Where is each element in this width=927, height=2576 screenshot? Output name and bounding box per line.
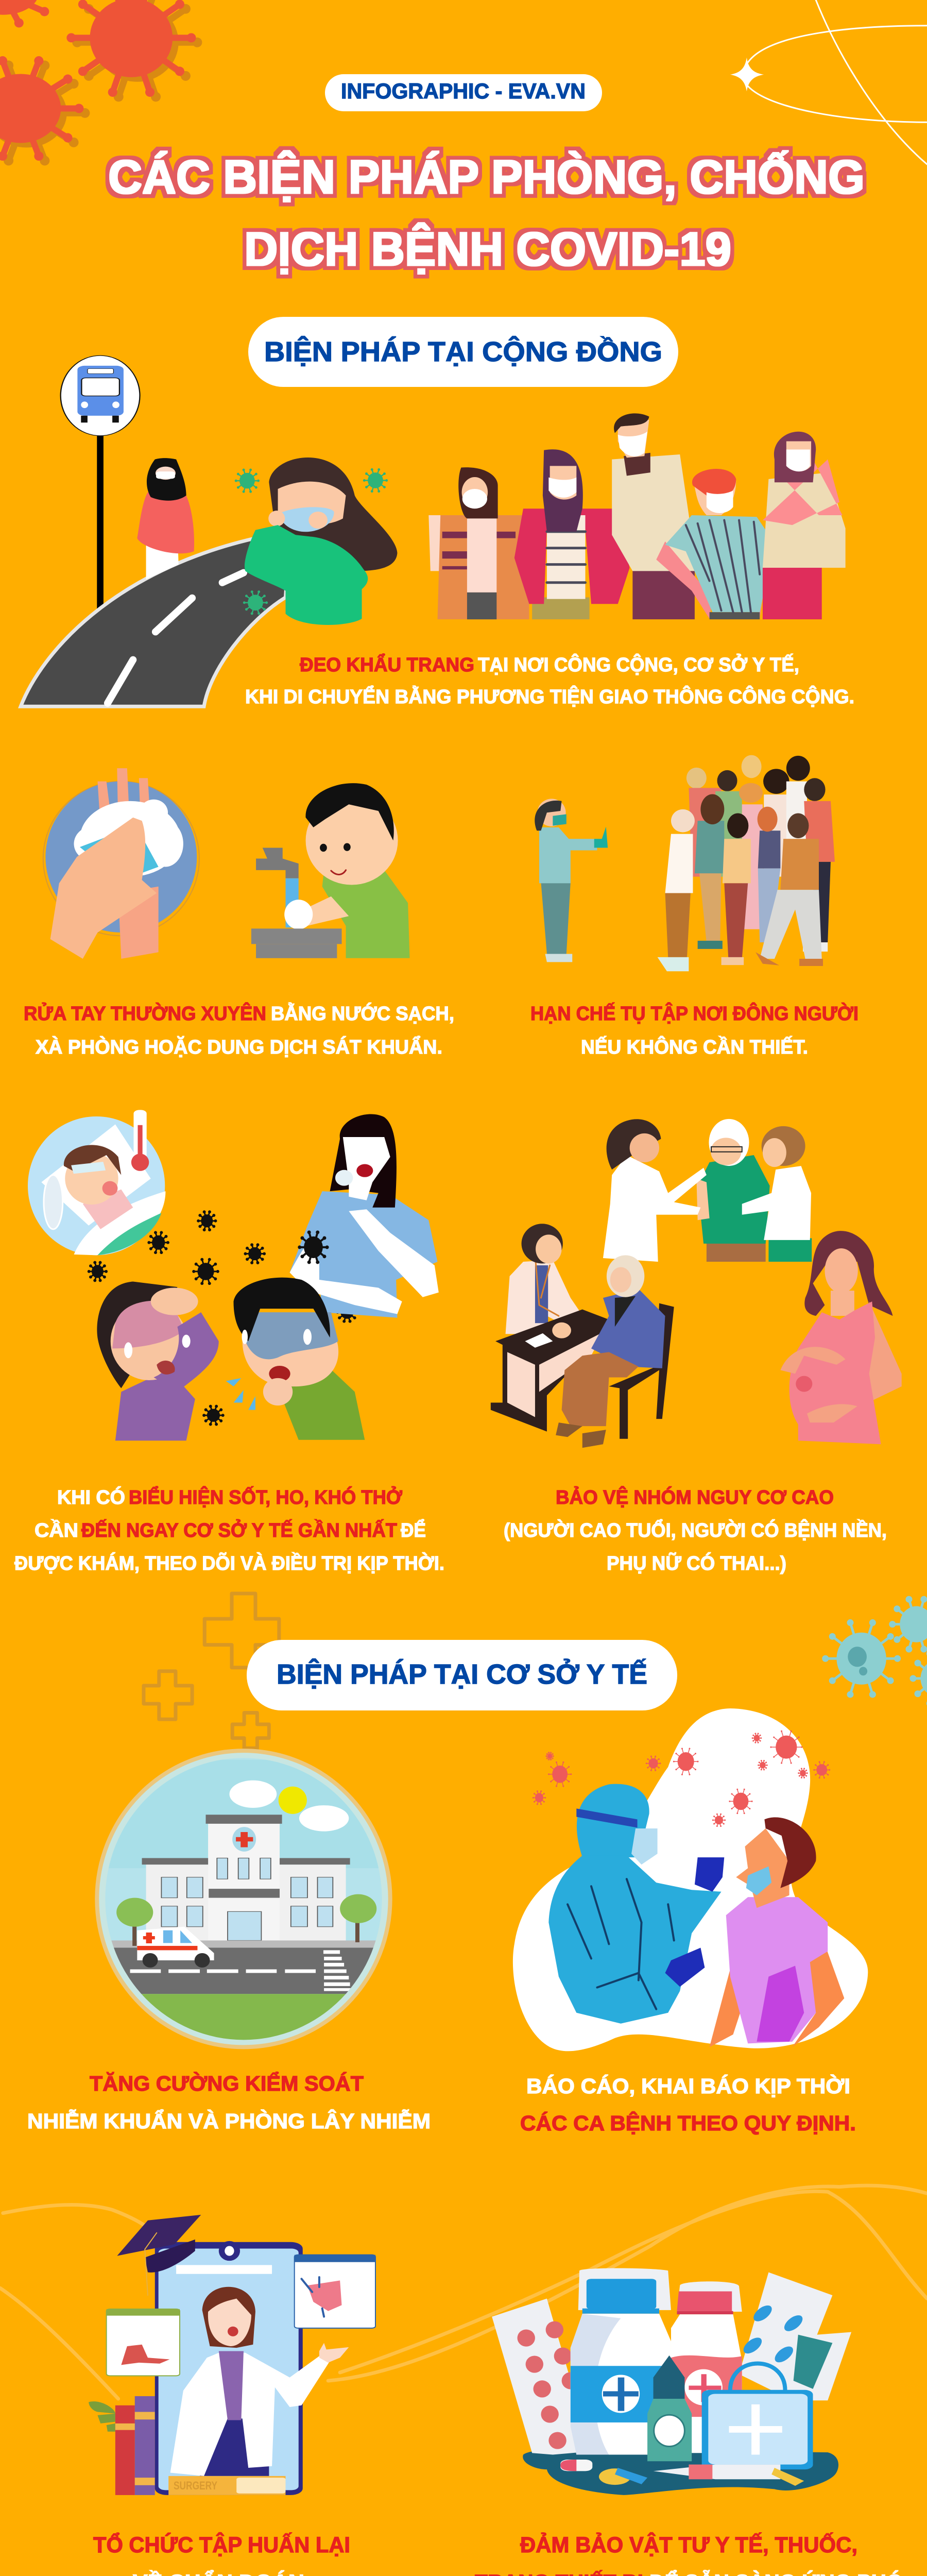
red virus cluster top-left [0, 0, 197, 161]
text: protect high-risk groups: BẢO VỆ NHÓM NGUY CƠ CAO [556, 1486, 834, 1509]
text: ensure supplies [475, 2532, 903, 2576]
text: wear masks [245, 653, 854, 708]
front row [658, 794, 823, 971]
dark base [523, 2450, 838, 2495]
decorative arcs and star top-right [730, 0, 927, 164]
icon: pregnant woman [780, 1231, 902, 1444]
doctor [170, 2287, 349, 2476]
icon: woman with fever holding forehead [97, 1282, 219, 1440]
text: when symptomatic: ĐƯỢC KHÁM, THEO DÕI VÀ ĐIỀU TRỊ KỊP THỜI. [14, 1552, 444, 1574]
icon: doctor treating elderly patient [603, 1119, 812, 1262]
books left [89, 2396, 155, 2495]
virus shadows [0, 0, 197, 161]
virus top [71, 0, 191, 92]
person orange coat [428, 467, 529, 619]
hospital in bubble [97, 1751, 390, 2047]
text: wash hands [24, 1002, 454, 1058]
text: infection control: TĂNG CƯỜNG KIỂM SOÁT [90, 2071, 364, 2095]
virus left [0, 61, 79, 156]
icon: black virus particles [89, 1212, 356, 1425]
section heading: community: BIỆN PHÁP TẠI CỘNG ĐỒNG [264, 336, 662, 367]
text: infection control: NHIỄM KHUẨN VÀ PHÒNG LÂY NHIỄM [27, 2109, 431, 2133]
icon: online medical training phone [89, 2215, 375, 2495]
teal viruses top-right [826, 1599, 927, 1703]
book label: SURGERY [174, 2479, 217, 2492]
icon: coughing man in green [226, 1278, 365, 1440]
title: DỊCH BỆNH COVID-19 [244, 223, 731, 276]
person red jacket [514, 449, 630, 619]
woman crossed arms [763, 432, 846, 619]
woman at bus stop [137, 458, 194, 579]
text: limit gatherings: HẠN CHẾ TỤ TẬP NƠI ĐÔNG NGƯỜI [530, 1002, 859, 1025]
text: report cases: BÁO CÁO, KHAI BÁO KỊP THỜI [526, 2074, 850, 2098]
small red viruses [533, 1731, 830, 1826]
text: protect high-risk groups: (NGƯỜI CAO TUỔI, NGƯỜI CÓ BỆNH NỀN, [504, 1518, 887, 1541]
icon: handwashing with soap [43, 768, 199, 959]
text: retraining [29, 2532, 410, 2576]
header pill: INFOGRAPHIC - EVA.VN [341, 79, 586, 103]
text: wear masks: TẠI NƠI CÔNG CỘNG, CƠ SỞ Y TẾ, [478, 653, 799, 676]
bus stop sign [61, 355, 140, 611]
icon: medicine and supplies [492, 2268, 851, 2495]
girl coughing with mask [245, 457, 397, 625]
left blister pack [492, 2298, 591, 2454]
right blister pack [739, 2272, 851, 2400]
desk [491, 1310, 609, 1432]
doctor in white coat [603, 1119, 707, 1262]
liver card [107, 2309, 180, 2376]
icon: sick child in bubble with thermometer [28, 1110, 165, 1255]
section heading: medical facilities [247, 1640, 677, 1710]
health worker in PPE [548, 1784, 746, 2024]
text: wear masks: ĐEO KHẨU TRANG [300, 653, 474, 676]
text: when symptomatic: KHI CÓ [57, 1486, 125, 1509]
nurse [742, 1126, 812, 1262]
scene clipped to bubble [105, 1760, 382, 2041]
text: report cases: CÁC CA BỆNH THEO QUY ĐỊNH. [520, 2111, 856, 2135]
text: when symptomatic: BIỂU HIỆN SỐT, HO, KHÓ THỞ [129, 1485, 403, 1509]
section heading: community [248, 317, 678, 387]
bottle blue label [571, 2268, 671, 2454]
icon: nasal swab test [513, 1708, 868, 2051]
elderly man green shirt [696, 1119, 770, 1262]
text: report cases [520, 2074, 856, 2135]
text: when symptomatic: ĐẾN NGAY CƠ SỞ Y TẾ GẦN NHẤT [81, 1519, 397, 1541]
text: limit gatherings: NẾU KHÔNG CẦN THIẾT. [581, 1035, 808, 1058]
text: when symptomatic: ĐỂ [401, 1518, 426, 1541]
text: ensure supplies: ĐẢM BẢO VẬT TƯ Y TẾ, THUỐC, [520, 2532, 857, 2557]
text: protect high-risk groups: PHỤ NỮ CÓ THAI...) [607, 1552, 786, 1574]
heart card [295, 2255, 375, 2328]
text: when symptomatic: CẦN [35, 1519, 78, 1541]
icon: crowd of people [658, 755, 835, 971]
title [108, 150, 865, 276]
phone [155, 2241, 303, 2495]
back row [686, 755, 835, 952]
nurse in coat [506, 1224, 586, 1334]
chair [609, 1303, 674, 1439]
patient [710, 1817, 844, 2047]
text: limit gatherings [530, 1002, 859, 1058]
text: retraining: TỔ CHỨC TẬP HUẤN LẠI [93, 2532, 350, 2557]
crowd wearing masks [428, 413, 846, 619]
dropper bottle [647, 2355, 692, 2461]
icon: boy washing hands [251, 783, 410, 958]
bottle red label [671, 2281, 742, 2453]
boy stripy shirt [656, 469, 783, 619]
text: protect high-risk groups [504, 1486, 887, 1574]
medical bag [702, 2363, 813, 2469]
pills and thermometer on base [560, 2460, 804, 2486]
graduation cap [117, 2215, 201, 2295]
icon: blood pressure check [491, 1224, 674, 1448]
icon: person keeping distance [535, 799, 608, 962]
header pill [325, 74, 602, 111]
white blob [513, 1708, 868, 2051]
text: when symptomatic [14, 1485, 444, 1574]
road [21, 533, 290, 706]
text: wear masks: KHI DI CHUYỂN BẰNG PHƯƠNG TIỆN GIAO THÔNG CÔNG CỘNG. [245, 685, 854, 708]
text: infection control [27, 2071, 431, 2133]
green virus icons around girl [236, 469, 387, 614]
icon: woman with shortness of breath [290, 1114, 439, 1318]
decorative waves [0, 2185, 927, 2399]
tall man cream sweater [612, 413, 696, 619]
text: wash hands: RỬA TAY THƯỜNG XUYÊN [24, 1002, 266, 1025]
virus corner [0, 0, 55, 23]
title: CÁC BIỆN PHÁP PHÒNG, CHỐNG [108, 150, 865, 204]
text: wash hands: XÀ PHÒNG HOẶC DUNG DỊCH SÁT KHUẨN. [36, 1035, 442, 1058]
surgery book [168, 2476, 285, 2495]
elderly patient [552, 1255, 665, 1448]
decorative crosses [144, 1594, 279, 1748]
text: wash hands: BẰNG NƯỚC SẠCH, [271, 1002, 454, 1025]
section heading: medical facilities: BIỆN PHÁP TẠI CƠ SỞ Y TẾ [277, 1658, 647, 1690]
